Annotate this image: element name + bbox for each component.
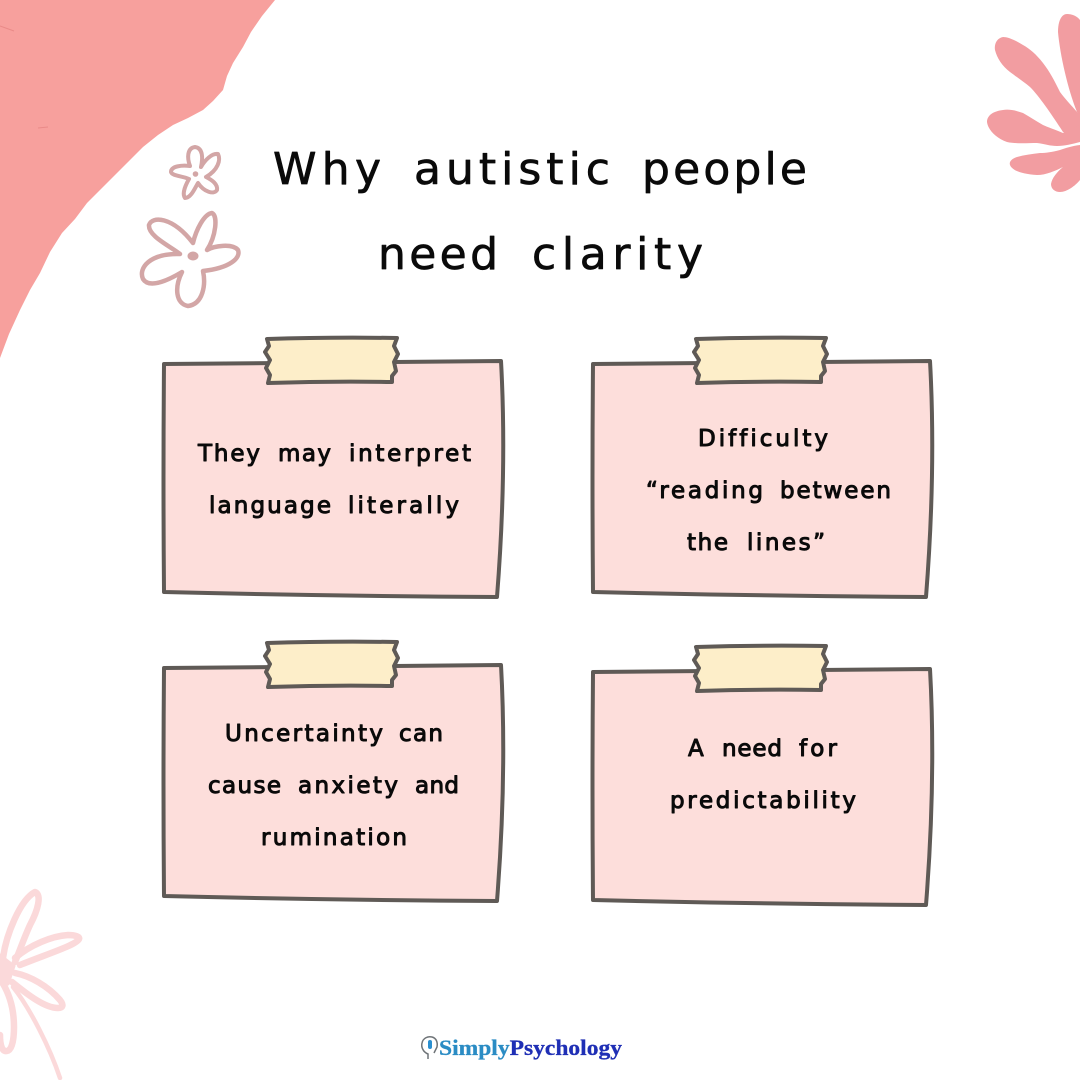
icon: solid petal flower top right <box>987 14 1080 192</box>
card text: Difficulty <box>698 426 828 452</box>
tape <box>265 642 398 687</box>
card text: may <box>278 441 331 467</box>
card text: language <box>209 493 331 519</box>
card text: rumination <box>261 825 407 851</box>
torn paper corner <box>0 0 275 358</box>
card text <box>670 736 856 814</box>
title: Why <box>273 144 381 195</box>
card text <box>208 721 459 851</box>
card text <box>197 441 471 519</box>
panel: predictability <box>592 646 932 905</box>
logo <box>422 1035 623 1060</box>
card text: lines” <box>747 530 825 556</box>
title: need <box>378 229 498 280</box>
card text: can <box>399 721 443 747</box>
panel: reading between the lines <box>592 338 932 597</box>
title <box>273 144 807 280</box>
panel: uncertainty <box>164 642 503 901</box>
card text: and <box>415 773 459 799</box>
icon: small outlined flower <box>171 147 219 198</box>
tape <box>694 646 827 691</box>
card text: cause <box>208 773 281 799</box>
card text: need <box>722 736 782 762</box>
card text <box>646 426 891 556</box>
card text: A <box>688 736 704 762</box>
tape <box>265 338 398 383</box>
tape <box>694 338 827 383</box>
card text: predictability <box>670 788 856 814</box>
card text: literally <box>348 493 459 519</box>
panel: interpret language literally <box>164 338 503 597</box>
card text: the <box>687 530 728 556</box>
card text: They <box>197 441 260 467</box>
card text: interpret <box>349 441 471 467</box>
icon: large outlined flower <box>142 213 238 306</box>
icon: head <box>422 1037 437 1059</box>
title: people <box>642 144 807 195</box>
title: clarity <box>532 229 703 280</box>
card text: Uncertainty <box>225 721 383 747</box>
title: autistic <box>414 144 610 195</box>
icon: pale line flower bottom left <box>0 892 79 1078</box>
wordmark: SimplyPsychology <box>439 1035 623 1060</box>
card text: “reading <box>646 478 763 504</box>
card text: between <box>780 478 891 504</box>
card text: anxiety <box>298 773 398 799</box>
card text: for <box>799 736 838 762</box>
